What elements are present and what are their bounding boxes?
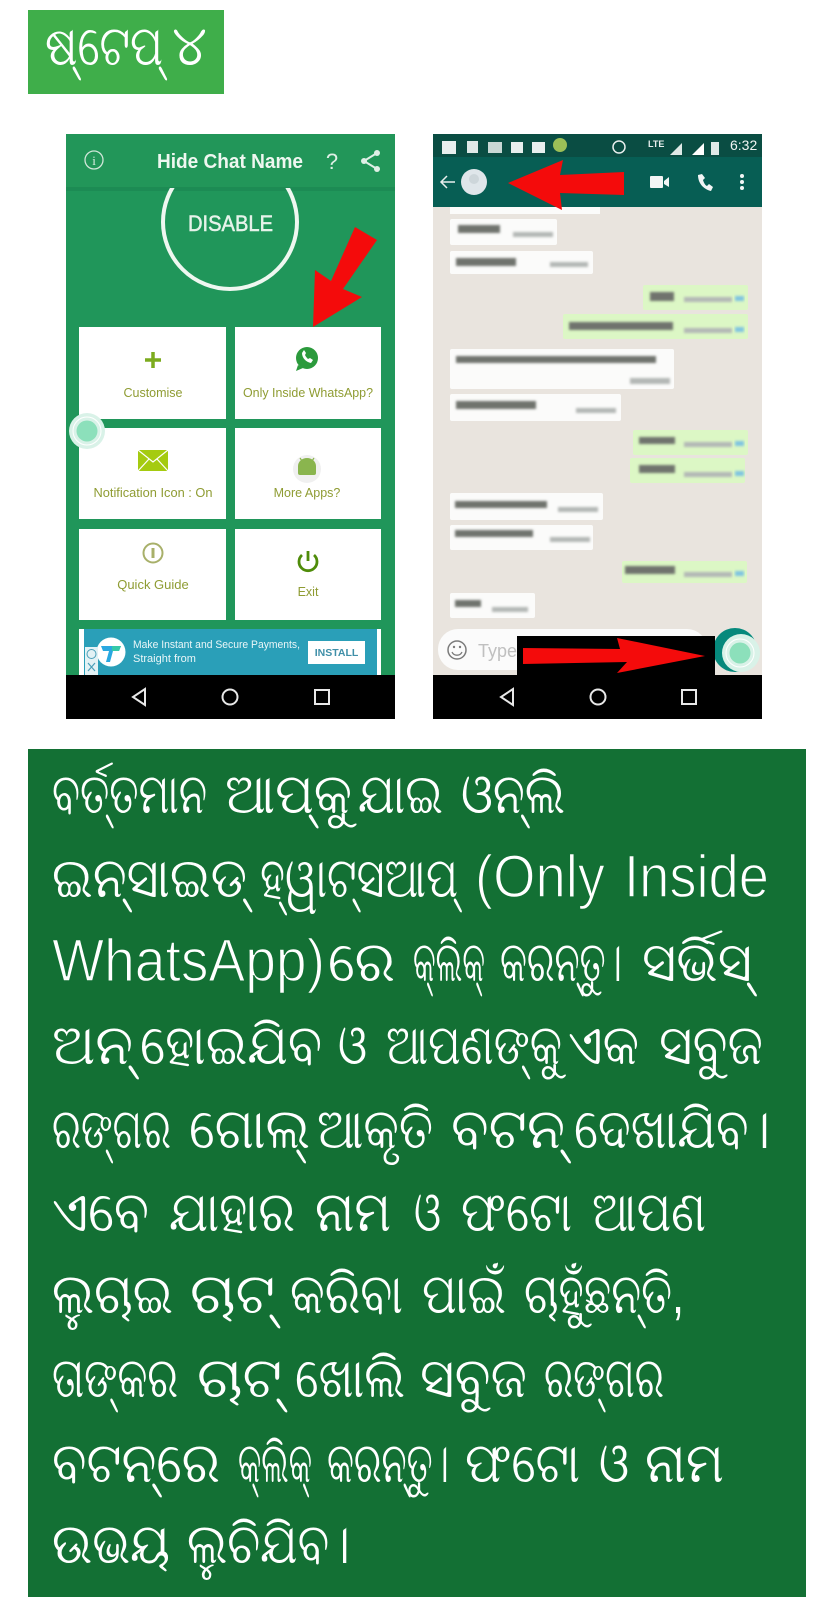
disable button: DISABLE bbox=[188, 211, 273, 236]
disable button bbox=[161, 188, 299, 291]
panel: instructions text: ହ୍ୱାଟ୍‌ସଆପ୍ bbox=[260, 846, 462, 915]
panel: instructions text: ନାମ bbox=[645, 1431, 724, 1494]
panel: instructions text: ଲୁଚିଯିବ। bbox=[187, 1512, 350, 1580]
app header bar bbox=[66, 134, 395, 191]
panel: instructions text: ଲୁଚାଇ bbox=[52, 1262, 173, 1330]
red arrow to avatar bbox=[508, 160, 624, 210]
card: quick guide: Quick Guide bbox=[117, 577, 189, 592]
panel: instructions text: ଏବେ bbox=[52, 1180, 149, 1243]
panel: instructions text: ଓ bbox=[338, 1013, 367, 1076]
panel: instructions text: ଇନ୍‌ସାଇଡ୍ bbox=[52, 846, 253, 912]
panel: instructions text: ଏକ bbox=[568, 1013, 639, 1076]
floating green button bbox=[69, 413, 105, 449]
panel: instructions text: ଚାଟ୍ bbox=[197, 1346, 288, 1412]
panel: instructions text: Inside bbox=[624, 843, 769, 910]
card: customise: Customise bbox=[123, 386, 183, 400]
card: notification icon: Notification Icon : On bbox=[94, 486, 213, 500]
ad banner: Straight from bbox=[133, 653, 196, 665]
panel: instructions text: ଅନ୍ bbox=[52, 1013, 140, 1079]
panel: instructions text: (Only bbox=[475, 843, 605, 910]
panel: instructions text: ଫଟୋ bbox=[461, 1180, 572, 1243]
card: quick guide bbox=[79, 529, 226, 620]
panel: instructions text: ଆପଣ bbox=[592, 1180, 706, 1243]
app header bar: Hide Chat Name bbox=[157, 151, 303, 173]
title badge bbox=[28, 10, 224, 94]
blurred chat bubbles bbox=[450, 207, 748, 618]
status bar bbox=[433, 134, 762, 157]
card: exit bbox=[235, 529, 381, 620]
title badge: ଷ୍ଟେପ୍ bbox=[45, 14, 168, 80]
app header bar: ? bbox=[326, 149, 338, 174]
panel: instructions text: ଆପଣଙ୍କୁ bbox=[386, 1013, 566, 1079]
panel: instructions text: ଚାହୁଁଛନ୍ତି, bbox=[524, 1262, 684, 1328]
card: exit: Exit bbox=[298, 585, 319, 599]
panel: instructions text: ଫଟୋ bbox=[465, 1431, 580, 1494]
panel: instructions text: ଗୋଲ୍ bbox=[189, 1097, 310, 1163]
panel: instructions text: ଆକୃତି bbox=[317, 1097, 433, 1165]
panel: instructions text bbox=[28, 749, 806, 1597]
panel: instructions text: ନାମ bbox=[315, 1180, 391, 1243]
panel: instructions text: ଓନ୍‌ଲି bbox=[461, 762, 565, 828]
panel: instructions text: WhatsApp) bbox=[52, 927, 325, 994]
navigation bar bbox=[433, 675, 762, 719]
message input box: Type bbox=[478, 641, 517, 661]
panel: instructions text: କରନ୍ତୁ। bbox=[327, 1431, 449, 1497]
ad banner: Make Instant and Secure Payments, bbox=[133, 639, 300, 651]
red arrow to whatsapp card bbox=[313, 227, 377, 327]
panel: instructions text: କରନ୍ତୁ। bbox=[500, 930, 622, 996]
panel: instructions text: ବଟନ୍ bbox=[451, 1097, 572, 1163]
panel: instructions text: ରେ bbox=[328, 930, 395, 993]
panel: instructions text: ସବୁଜ bbox=[420, 1346, 527, 1412]
panel: instructions text: ବର୍ତ୍ତମାନ bbox=[52, 762, 207, 828]
app header bar: i bbox=[92, 153, 96, 168]
status bar: 6:32 bbox=[730, 137, 757, 153]
status bar: LTE bbox=[648, 139, 664, 149]
card: customise bbox=[79, 327, 226, 419]
panel: instructions text: ଯାହାର bbox=[169, 1180, 295, 1243]
panel: instructions text: ତାଙ୍କର bbox=[52, 1346, 178, 1412]
title badge: ୪ bbox=[172, 14, 207, 77]
panel: whatsapp chat screenshot bbox=[433, 134, 762, 719]
card: notification icon bbox=[79, 428, 226, 519]
chat header bbox=[433, 157, 762, 207]
panel: instructions text: କରିବା bbox=[290, 1262, 403, 1325]
panel: instructions text: ଯାଇ bbox=[358, 762, 443, 825]
panel: instructions text: ଓ bbox=[599, 1431, 629, 1494]
panel: instructions text: ରଙ୍ଗର bbox=[52, 1097, 171, 1163]
panel: instructions text: ସର୍ଭିସ୍ bbox=[642, 930, 758, 996]
panel: instructions text: ସବୁଜ bbox=[659, 1013, 763, 1079]
panel: instructions text: ରଙ୍ଗର bbox=[544, 1346, 664, 1412]
panel: instructions text: ଆପ୍‌କୁ bbox=[225, 762, 357, 828]
green floating button bbox=[713, 628, 760, 672]
card: more apps: More Apps? bbox=[274, 486, 340, 500]
panel: instructions text: ପାଇଁ bbox=[422, 1262, 506, 1325]
panel: instructions text: ଉଭୟ bbox=[52, 1512, 170, 1575]
card: only inside whatsapp: Only Inside WhatsApp? bbox=[243, 386, 373, 400]
card: only inside whatsapp bbox=[235, 327, 381, 419]
panel: instructions text: ହୋଇଯିବ bbox=[140, 1013, 322, 1076]
panel: instructions text: ଦେଖାଯିବ। bbox=[574, 1097, 770, 1160]
ad banner bbox=[79, 629, 381, 675]
panel: instructions text: କ୍ଲିକ୍ bbox=[238, 1431, 312, 1497]
navigation bar bbox=[66, 675, 395, 719]
panel: instructions text: ଚାଟ୍ bbox=[190, 1262, 281, 1328]
card: more apps bbox=[235, 428, 381, 519]
ad banner: INSTALL bbox=[315, 647, 359, 659]
panel: app screenshot bbox=[66, 134, 395, 719]
panel: instructions text: ଓ bbox=[414, 1180, 441, 1243]
message input box bbox=[438, 629, 707, 670]
panel: instructions text: ଖୋଲି bbox=[295, 1346, 405, 1409]
panel: instructions text: କ୍ଲିକ୍ bbox=[413, 930, 485, 996]
panel: instructions text: ବଟନ୍‌ରେ bbox=[52, 1431, 220, 1497]
black box with red arrow bbox=[517, 636, 715, 675]
